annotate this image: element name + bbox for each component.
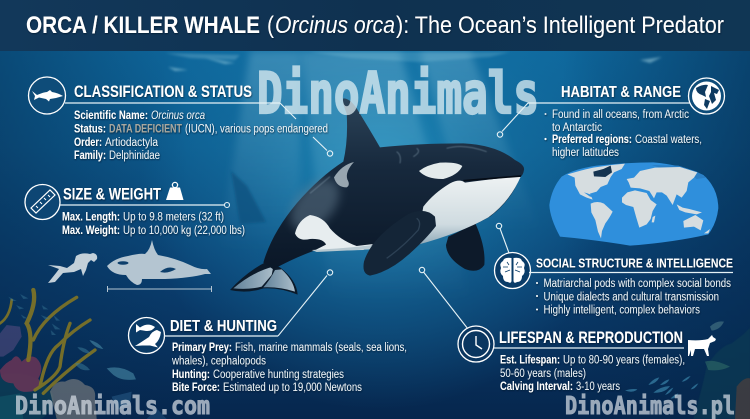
body and dorsal fin xyxy=(263,98,524,269)
icon: orca silhouette with scale xyxy=(107,240,212,292)
title banner xyxy=(0,0,750,51)
icon: brain xyxy=(494,252,530,288)
details: Order: xyxy=(74,137,102,149)
details: Up to 10,000 kg (22,000 lbs) xyxy=(123,225,245,237)
details: (IUCN), various pops endangered xyxy=(185,124,328,136)
details: to Antarctic xyxy=(552,122,602,134)
details: 50-60 years (males) xyxy=(500,368,586,380)
details xyxy=(74,110,328,162)
australia xyxy=(683,215,703,230)
icon: shark xyxy=(28,77,66,114)
madagascar xyxy=(652,216,655,222)
title banner: ( xyxy=(267,12,274,39)
leader lines xyxy=(278,103,528,336)
icon: diver silhouette xyxy=(48,253,97,283)
details: Hunting: xyxy=(172,369,210,381)
white belly xyxy=(417,176,521,245)
icon: globe xyxy=(688,78,724,114)
flank patch xyxy=(295,215,373,251)
panel: diet and hunting xyxy=(128,318,407,394)
heading: HABITAT & RANGE xyxy=(561,84,681,101)
details: Fish, marine mammals (seals, sea lions, xyxy=(235,342,407,354)
details: Highly intelligent, complex behaviors xyxy=(544,304,700,316)
title banner: ): The Ocean’s Intelligent Predator xyxy=(396,12,724,39)
reef: bottom right xyxy=(625,321,750,419)
details: Found in all oceans, from Arctic xyxy=(552,109,689,121)
north america xyxy=(567,164,625,200)
details: whales), cephalopods xyxy=(171,356,266,368)
details: Preferred regions: xyxy=(552,134,632,146)
details: Orcinus orca xyxy=(151,110,205,122)
details: Calving Interval: xyxy=(500,381,573,393)
icon: ruler xyxy=(25,184,60,220)
panel: classification and status xyxy=(28,77,328,162)
icon: fish and seal xyxy=(128,318,164,354)
details xyxy=(500,354,685,393)
title banner: ORCA / KILLER WHALE xyxy=(26,12,260,39)
near pectoral fin xyxy=(363,211,436,276)
world map xyxy=(549,162,718,246)
details: Status: xyxy=(74,124,106,136)
panel: size and weight xyxy=(25,182,245,292)
panel: habitat and range xyxy=(528,78,724,246)
rear sheen xyxy=(281,170,349,240)
details: Est. Lifespan: xyxy=(500,354,560,366)
details xyxy=(62,212,245,237)
panel: social structure and intelligence xyxy=(494,252,733,316)
eye patch xyxy=(419,162,462,179)
eurasia xyxy=(627,167,697,205)
details: higher latitudes xyxy=(552,147,619,159)
icon: calf xyxy=(688,335,716,356)
details: Max. Length: xyxy=(62,212,120,224)
panel: lifespan and reproduction xyxy=(458,326,716,393)
watermark: center: DinoAnimals xyxy=(257,61,539,127)
heading: CLASSIFICATION & STATUS xyxy=(74,83,252,101)
orca whale xyxy=(230,98,524,295)
south america xyxy=(591,202,613,238)
details: Up to 9.8 meters (32 ft) xyxy=(123,212,224,224)
mouth line xyxy=(463,176,521,181)
saddle patch xyxy=(334,162,354,187)
heading: LIFESPAN & REPRODUCTION xyxy=(499,329,683,347)
africa xyxy=(622,190,657,228)
details: Estimated up to 19,000 Newtons xyxy=(223,382,362,394)
distant whale fin xyxy=(231,171,266,224)
heading: SIZE & WEIGHT xyxy=(63,186,161,204)
details xyxy=(544,109,702,159)
icon: clock xyxy=(458,326,494,362)
details: Family: xyxy=(74,150,106,162)
far pectoral fin xyxy=(446,223,485,271)
details: Artiodactyla xyxy=(105,137,159,149)
details: Primary Prey: xyxy=(172,342,232,354)
details: DATA DEFICIENT xyxy=(109,124,182,136)
back highlights xyxy=(310,146,487,193)
details: Up to 80-90 years (females), xyxy=(563,354,685,366)
icon: weight xyxy=(166,182,184,200)
details: Bite Force: xyxy=(172,382,220,394)
details: Coastal waters, xyxy=(635,134,702,146)
details: Delphinidae xyxy=(109,150,160,162)
reef: bottom left xyxy=(0,290,167,419)
details: Cooperative hunting strategies xyxy=(213,369,344,381)
details xyxy=(536,278,731,316)
heading: DIET & HUNTING xyxy=(170,318,277,335)
details: Max. Weight: xyxy=(62,225,120,237)
tail flukes xyxy=(230,262,298,295)
details: Scientific Name: xyxy=(74,110,148,122)
title banner: Orcinus orca xyxy=(275,12,395,39)
details: 3-10 years xyxy=(576,381,620,393)
indonesia xyxy=(677,204,702,214)
details: Unique dialects and cultural transmission xyxy=(544,292,719,304)
details xyxy=(171,342,407,394)
